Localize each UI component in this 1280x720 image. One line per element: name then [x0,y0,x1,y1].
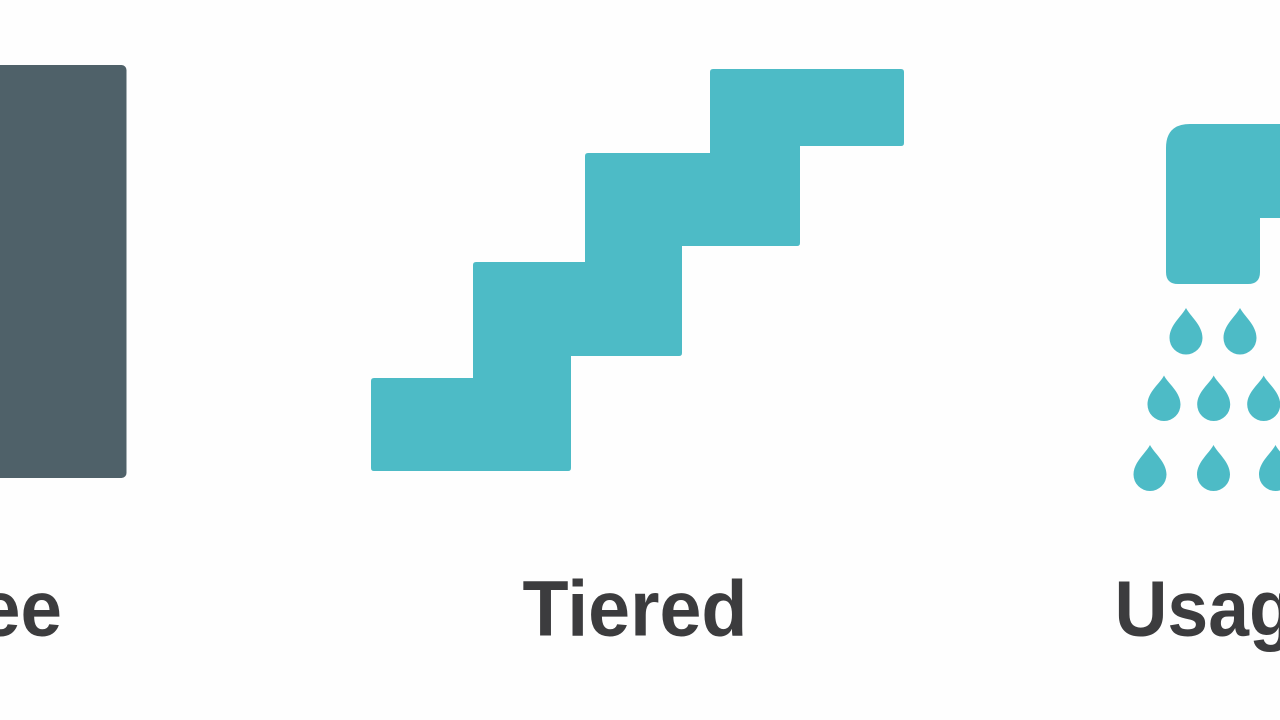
label: tiered: Tiered [522,564,748,652]
drops row 1 [1170,308,1202,355]
tap [1166,124,1280,284]
icon: tiered stairs [371,69,904,471]
icon: usage tap with water drops [1134,124,1280,491]
icon: flat fee rectangle [0,65,126,478]
drops row 2 [1148,376,1180,421]
drops row 3 [1134,445,1166,491]
